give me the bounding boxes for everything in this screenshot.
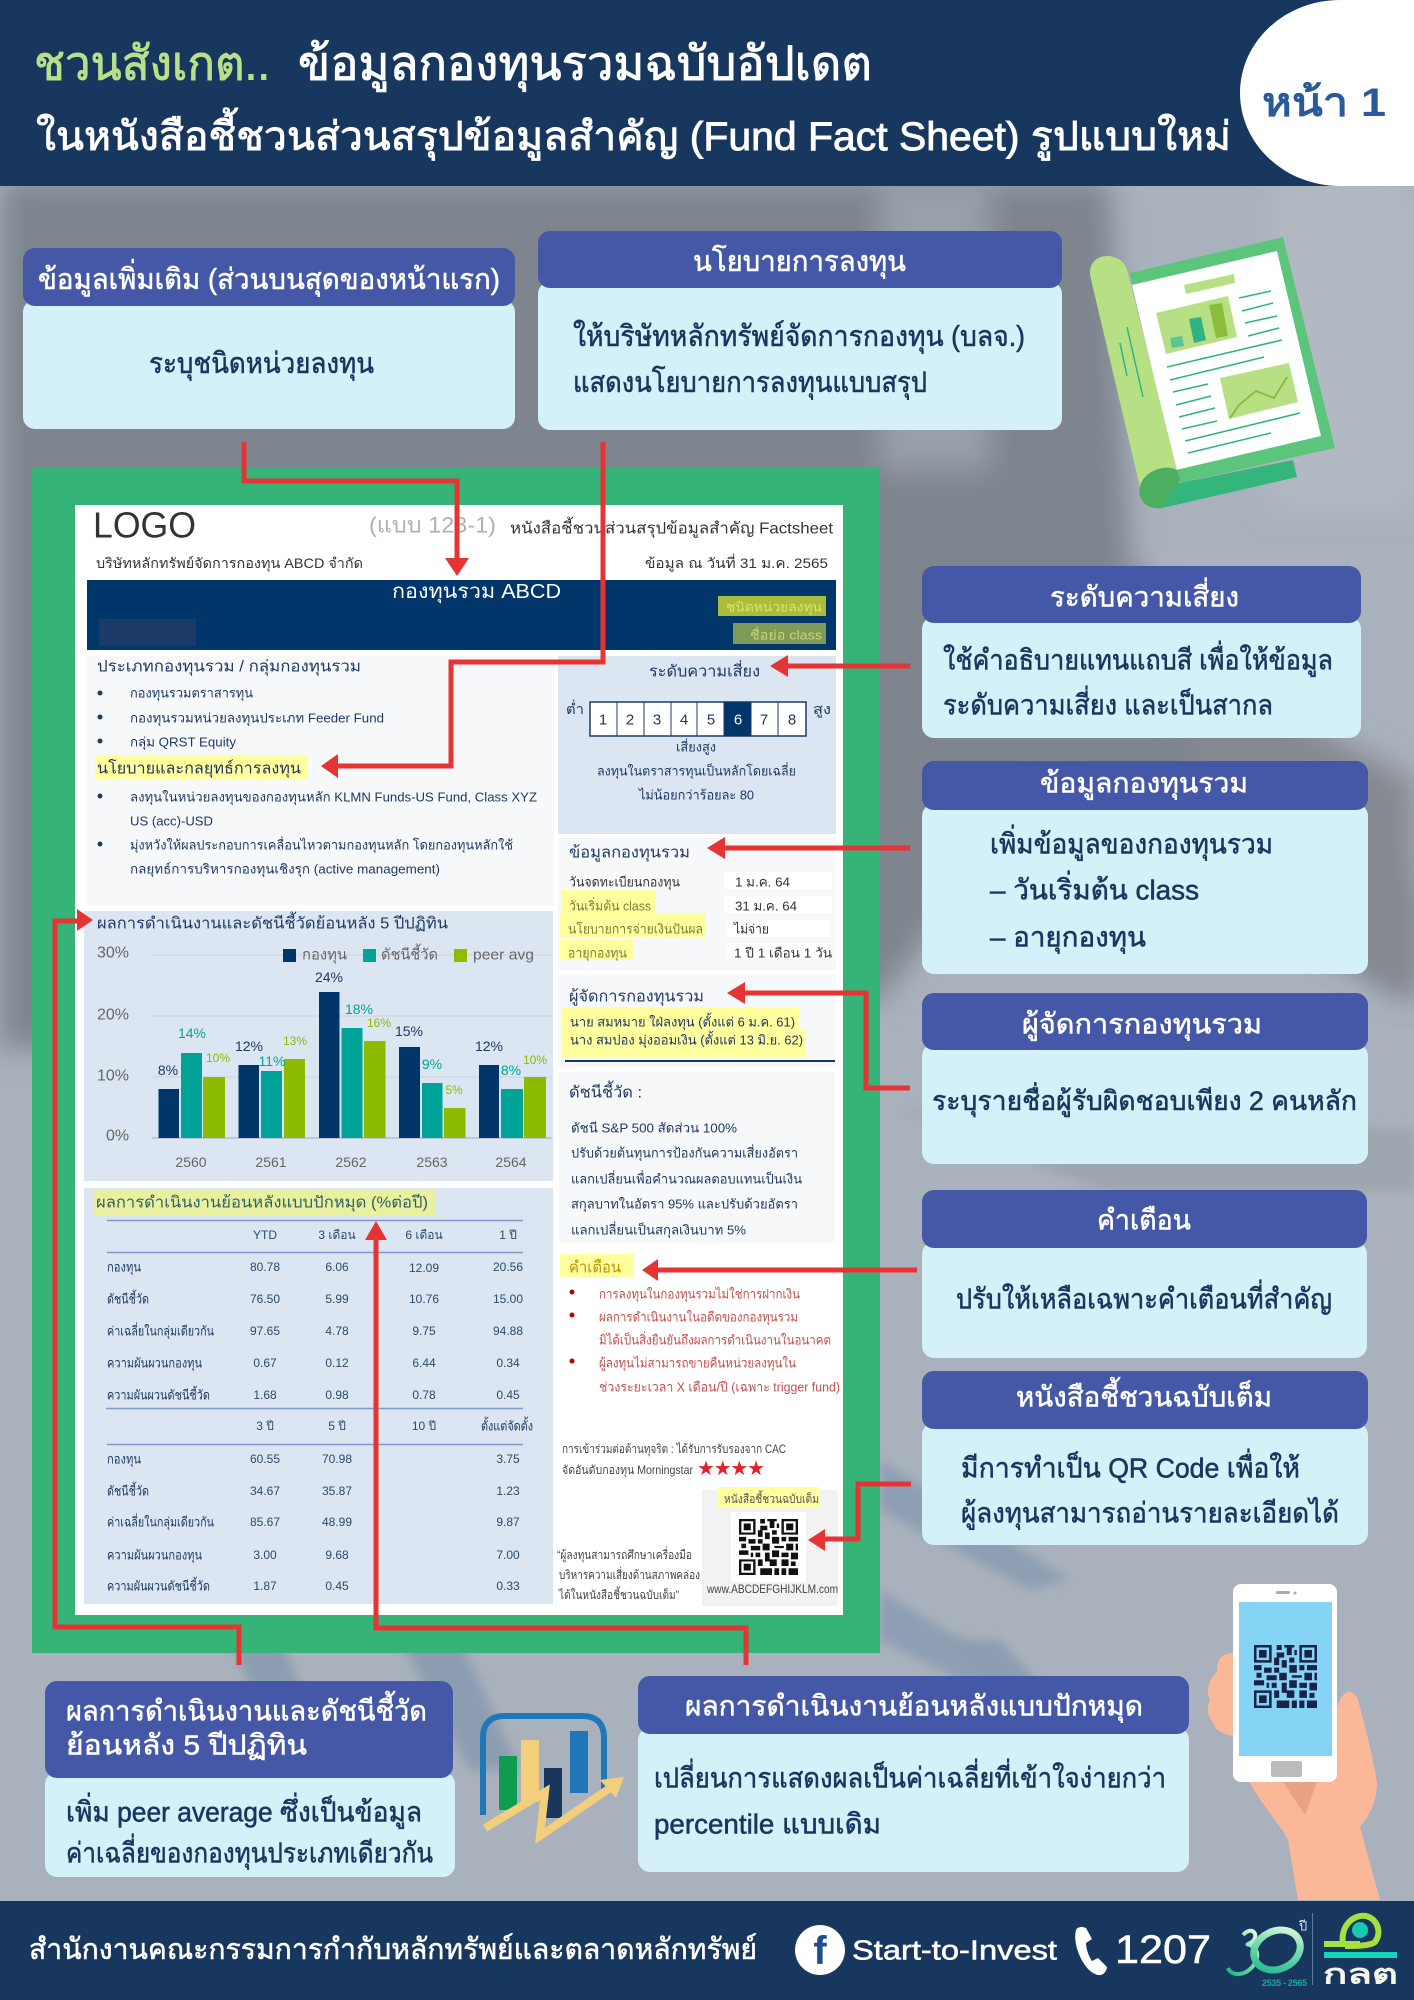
risk level panel: ระดับความเสี่ยง — [649, 660, 760, 680]
panel: fund manager — [922, 993, 1368, 1164]
axis labels: 20% — [97, 1006, 129, 1024]
arrow: risk panel — [770, 655, 910, 677]
arrow: warnings — [642, 1259, 917, 1281]
panel: 5 year performance note: ผลการดำเนินงานและดัชนีชี้วัด — [66, 1690, 427, 1726]
QR code panel: www.ABCDEFGHIJKLM.com — [706, 1582, 838, 1596]
table rows first block: 80.78 — [250, 1260, 280, 1274]
table rows second block: ความผันผวนกองทุน — [107, 1548, 202, 1564]
footer band — [0, 1901, 1414, 2000]
sheet header: หนังสือชี้ชวนส่วนสรุปข้อมูลสำคัญ Factsheet — [510, 516, 834, 538]
panel: investment policy: ให้บริษัทหลักทรัพย์จัดการกองทุน (บลจ.) — [573, 319, 1025, 354]
table rows first block: 5.99 — [325, 1292, 349, 1306]
panel: 5 year performance note: ค่าเฉลี่ยของกองทุนประเภทเดียวกัน — [66, 1834, 433, 1870]
QR code panel: หนังสือชี้ชวนฉบับเต็ม — [724, 1490, 819, 1506]
trailing returns table: ผลการดำเนินงานย้อนหลังแบบปักหมุด (%ต่อปี) — [96, 1194, 428, 1212]
page badge: หน้า 1 — [1262, 81, 1386, 125]
warnings: ผู้ลงทุนไม่สามารถขายคืนหน่วยลงทุนใน — [599, 1356, 796, 1372]
table rows first block: YTD — [253, 1228, 277, 1242]
table rows first block: 94.88 — [493, 1324, 523, 1338]
CAC and Morningstar rating: การเข้าร่วมต่อต้านทุจริต : ได้รับการรับรองจาก CAC — [562, 1442, 786, 1457]
table rows first block: ค่าเฉลี่ยในกลุ่มเดียวกัน — [107, 1322, 214, 1340]
panel: risk level: ระดับความเสี่ยง — [1050, 578, 1239, 612]
table rows first block: 1.68 — [253, 1388, 277, 1402]
table rows second block: 70.98 — [322, 1452, 352, 1466]
bar chart: 5 year performance: ผลการดำเนินงานและดัชนีชี้วัดย้อนหลัง 5 ปีปฏิทิน — [97, 912, 448, 932]
bar value labels: 8% — [501, 1062, 521, 1078]
bars — [158, 992, 546, 1138]
risk scale: 3 — [653, 712, 661, 728]
investor note: บริหารความเสี่ยงด้านสภาพคล่อง — [559, 1566, 700, 1582]
page badge — [1240, 0, 1414, 186]
risk scale: 7 — [760, 712, 768, 728]
table rows second block: 0.45 — [325, 1579, 349, 1593]
table rows second block: 10 ปี — [412, 1419, 436, 1433]
bar value labels: 5% — [445, 1083, 463, 1097]
fund type and policy text: มุ่งหวังให้ผลประกอบการเคลื่อนไหวตามกองทุนหลัก โดยกองทุนหลักใช้ — [130, 836, 513, 854]
panel: full prospectus: หนังสือชี้ชวนฉบับเต็ม — [1016, 1376, 1272, 1412]
risk level panel — [558, 656, 836, 834]
year labels: 2560 — [175, 1154, 207, 1170]
risk scale: 8 — [788, 712, 796, 728]
QR code panel — [702, 1487, 838, 1606]
table rows first block: 1 ปี — [499, 1228, 517, 1242]
table rows second block: 35.87 — [322, 1484, 352, 1498]
sheet header: ข้อมูล ณ วันที่ 31 ม.ค. 2565 — [645, 554, 828, 572]
icon: fact sheet document — [1090, 237, 1335, 508]
risk level panel: ไม่น้อยกว่าร้อยละ 80 — [638, 788, 754, 802]
bar value labels: 12% — [475, 1038, 503, 1054]
risk scale: 1 — [599, 712, 607, 728]
panel: risk level — [922, 566, 1361, 738]
table rows first block: ความผันผวนดัชนีชี้วัด — [107, 1386, 210, 1402]
risk scale: 6 — [734, 712, 742, 728]
table rows first block: 9.75 — [412, 1324, 436, 1338]
panel: trailing returns note — [638, 1676, 1189, 1872]
table rows first block: 15.00 — [493, 1292, 523, 1306]
investor note: ได้ในหนังสือชี้ชวนฉบับเต็ม” — [558, 1586, 679, 1602]
benchmark: ดัชนี S&P 500 สัดส่วน 100% — [571, 1120, 737, 1136]
fund managers: นาย สมหมาย ใฝ่ลงทุน (ตั้งแต่ 6 ม.ค. 61) — [570, 1012, 795, 1030]
legend: ดัชนีชี้วัด — [381, 944, 438, 964]
bar value labels: 15% — [395, 1023, 423, 1039]
table rows second block: 3.75 — [496, 1452, 520, 1466]
panel: warnings: ปรับให้เหลือเฉพาะคำเตือนที่สำคัญ — [956, 1280, 1332, 1314]
table rows second block: 48.99 — [322, 1515, 352, 1529]
table rows first block: ความผันผวนกองทุน — [107, 1356, 202, 1372]
risk scale: 5 — [707, 712, 715, 728]
table rows second block: 85.67 — [250, 1515, 280, 1529]
icon: hand holding phone with QR — [1208, 1584, 1380, 1900]
CAC and Morningstar rating: จัดอันดับกองทุน Morningstar — [562, 1463, 693, 1478]
CAC and Morningstar rating: ★★★★ — [697, 1458, 765, 1480]
fund information table — [558, 838, 836, 970]
warnings — [560, 1254, 840, 1394]
year labels: 2561 — [255, 1154, 287, 1170]
table rows second block: 9.87 — [496, 1515, 520, 1529]
table rows second block: กองทุน — [107, 1452, 141, 1468]
year labels: 2564 — [495, 1154, 527, 1170]
legend — [283, 944, 534, 964]
benchmark: ปรับด้วยต้นทุนการป้องกันความเสี่ยงอัตรา — [571, 1144, 798, 1162]
logo: 30 years: 2535 - 2565 — [1262, 1978, 1307, 1988]
icon: rising bar chart — [483, 1716, 624, 1836]
table rows first block: ดัชนีชี้วัด — [107, 1290, 149, 1306]
investor note — [557, 1546, 700, 1602]
risk scale — [590, 702, 806, 736]
table rows first block: 97.65 — [250, 1324, 280, 1338]
bar value labels: 10% — [206, 1051, 230, 1065]
table rows first block: กองทุน — [107, 1260, 141, 1276]
table rows second block: ความผันผวนดัชนีชี้วัด — [107, 1576, 210, 1594]
table rows first block: 0.12 — [325, 1356, 349, 1370]
legend: peer avg — [473, 946, 534, 964]
bar value labels: 10% — [523, 1053, 547, 1067]
panel: 5 year performance note: เพิ่ม peer average ซึ่งเป็นข้อมูล — [66, 1792, 422, 1830]
axis labels: 0% — [106, 1128, 129, 1144]
risk level panel: ต่ำ — [566, 700, 584, 717]
title line 1: ข้อมูลกองทุนรวมฉบับอัปเดต — [298, 36, 872, 92]
risk scale: 2 — [626, 712, 634, 728]
table rows first block: 6 เดือน — [405, 1228, 443, 1242]
panel: full prospectus — [922, 1371, 1368, 1545]
table rows first block: 0.34 — [496, 1356, 520, 1370]
bar value labels: 24% — [315, 969, 343, 985]
panel: additional info: ข้อมูลเพิ่มเติม (ส่วนบนสุดของหน้าแรก) — [38, 259, 500, 297]
panel: risk level: ระดับความเสี่ยง และเป็นสากล — [943, 686, 1273, 720]
sheet header: บริษัทหลักทรัพย์จัดการกองทุน ABCD จำกัด — [96, 555, 363, 572]
panel: trailing returns note: เปลี่ยนการแสดงผลเป็นค่าเฉลี่ยที่เข้าใจง่ายกว่า — [654, 1758, 1166, 1794]
fund type and policy text: กลุ่ม QRST Equity — [130, 734, 237, 750]
logo: 30 years — [1228, 1918, 1307, 1988]
fund information table: ข้อมูลกองทุนรวม — [569, 844, 690, 862]
fund name band — [87, 580, 836, 650]
table rows second block: ดัชนีชี้วัด — [107, 1482, 149, 1498]
panel: additional info — [23, 248, 515, 429]
year labels: 2563 — [416, 1154, 448, 1170]
table rows first block: 0.98 — [325, 1388, 349, 1402]
benchmark: สกุลบาทในอัตรา 95% และปรับด้วยอัตรา — [571, 1196, 798, 1212]
fund type and policy text — [87, 656, 554, 905]
table rows first block: 6.44 — [412, 1356, 436, 1370]
fund type and policy text: ลงทุนในหน่วยลงทุนของกองทุนหลัก KLMN Funds-US Fund, Class XYZ — [130, 790, 537, 806]
table rows second block: ค่าเฉลี่ยในกลุ่มเดียวกัน — [107, 1514, 214, 1530]
bar value labels: 18% — [345, 1001, 373, 1017]
panel: fund information: เพิ่มข้อมูลของกองทุนรวม — [990, 824, 1273, 862]
table rows first block: 0.45 — [496, 1388, 520, 1402]
risk level panel: สูง — [813, 701, 831, 718]
bar value labels: 12% — [235, 1038, 263, 1054]
panel: trailing returns note: ผลการดำเนินงานย้อนหลังแบบปักหมุด — [685, 1690, 1143, 1724]
arrow: 5 year chart — [55, 909, 239, 1665]
panel: fund manager: ผู้จัดการกองทุนรวม — [1022, 1008, 1262, 1042]
fund information table: วันเริ่มต้น class — [569, 898, 651, 914]
fund type and policy text: กองทุนรวมตราสารทุน — [130, 686, 253, 702]
investor note: “ผู้ลงทุนสามารถศึกษาเครื่องมือ — [557, 1546, 692, 1563]
warnings: มิได้เป็นสิ่งยืนยันถึงผลการดำเนินงานในอนาคต — [599, 1330, 831, 1348]
table rows second block: 5 ปี — [328, 1419, 346, 1433]
icon: facebook: f — [813, 1929, 827, 1973]
warnings: การลงทุนในกองทุนรวมไม่ใช่การฝากเงิน — [599, 1286, 800, 1302]
axis labels: 30% — [97, 944, 129, 962]
panel: fund information — [922, 761, 1368, 974]
bar value labels: 9% — [422, 1056, 442, 1072]
fund information table: 1 ปี 1 เดือน 1 วัน — [734, 946, 832, 960]
table rows second block: 34.67 — [250, 1484, 280, 1498]
table rows first block — [107, 1228, 523, 1402]
fund name band: ชนิดหน่วยลงทุน — [726, 600, 822, 616]
warnings: ผลการดำเนินงานในอดีตของกองทุนรวม — [599, 1310, 798, 1326]
panel: additional info: ระบุชนิดหน่วยลงทุน — [149, 348, 374, 381]
table rows second block: 0.33 — [496, 1579, 520, 1593]
panel: trailing returns note: percentile แบบเดิม — [654, 1808, 881, 1840]
panel: risk level: ใช้คำอธิบายแทนแถบสี เพื่อให้ข้อมูล — [943, 640, 1333, 678]
icon: facebook — [795, 1925, 845, 1975]
panel: 5 year performance note: ย้อนหลัง 5 ปีปฏิทิน — [66, 1730, 307, 1760]
panel: fund information: – อายุกองทุน — [990, 922, 1146, 954]
fund name band: ชื่อย่อ class — [750, 626, 823, 642]
hotline number: 1207 — [1115, 1928, 1211, 1972]
table rows first block: 3 เดือน — [318, 1228, 356, 1242]
fund type and policy text: กองทุนรวมหน่วยลงทุนประเภท Feeder Fund — [130, 710, 384, 726]
bar value labels: 8% — [158, 1062, 178, 1078]
fund information table: 31 ม.ค. 64 — [735, 898, 797, 914]
panel: investment policy — [538, 231, 1062, 430]
year labels — [175, 1154, 527, 1170]
sheet header: (แบบ 123-1) — [369, 512, 496, 538]
table rows second block: 3.00 — [253, 1548, 277, 1562]
facebook page name: Start-to-Invest — [852, 1934, 1057, 1966]
title line 1: ชวนสังเกต.. — [34, 36, 270, 90]
arrow: policy to strategy section — [321, 442, 603, 778]
fund information table: วันจดทะเบียนกองทุน — [569, 874, 680, 890]
panel: full prospectus: มีการทำเป็น QR Code เพื่อให้ — [961, 1448, 1300, 1484]
benchmark: แลกเปลี่ยนเป็นสกุลเงินบาท 5% — [571, 1220, 746, 1238]
table rows first block: 76.50 — [250, 1292, 280, 1306]
panel: 5 year performance note — [45, 1681, 455, 1877]
title line 2: ในหนังสือชี้ชวนส่วนสรุปข้อมูลสำคัญ (Fund Fact Sheet) รูปแบบใหม่ — [36, 107, 1231, 161]
table rows second block: 3 ปี — [256, 1419, 274, 1433]
table rows first block: 10.76 — [409, 1292, 439, 1306]
fund type and policy text: US (acc)-USD — [130, 814, 213, 828]
fund information table: ไม่จ่าย — [733, 922, 769, 936]
table rows first block: 12.09 — [409, 1261, 439, 1275]
legend: กองทุน — [302, 946, 347, 964]
table rows second block: 7.00 — [496, 1548, 520, 1562]
logo: 30 years: ปี — [1298, 1918, 1307, 1934]
bar value labels: 13% — [283, 1034, 307, 1048]
table rows second block: ตั้งแต่จัดตั้ง — [481, 1416, 533, 1434]
trailing returns table — [84, 1188, 553, 1604]
sheet header: LOGO — [93, 504, 196, 546]
bar value labels: 14% — [178, 1025, 206, 1041]
panel: investment policy: นโยบายการลงทุน — [693, 244, 906, 279]
panel: fund information: ข้อมูลกองทุนรวม — [1040, 768, 1248, 800]
benchmark — [559, 1072, 835, 1243]
arrow: fund manager — [727, 982, 910, 1088]
fund managers — [558, 975, 836, 1067]
fund type and policy text: ประเภทกองทุนรวม / กลุ่มกองทุนรวม — [97, 658, 361, 676]
fund information table: 1 ม.ค. 64 — [735, 874, 790, 890]
panel: warnings — [922, 1190, 1367, 1358]
fund managers: ผู้จัดการกองทุนรวม — [569, 988, 704, 1006]
fund type and policy text: นโยบายและกลยุทธ์การลงทุน — [97, 758, 301, 778]
table rows second block: 1.23 — [496, 1484, 520, 1498]
benchmark: แลกเปลี่ยนเพื่อคำนวณผลตอบแทนเป็นเงิน — [571, 1170, 802, 1186]
risk level panel: ลงทุนในตราสารทุนเป็นหลักโดยเฉลี่ย — [597, 762, 796, 780]
table rows first block: 0.78 — [412, 1388, 436, 1402]
table rows second block: 9.68 — [325, 1548, 349, 1562]
fund managers: นาง สมปอง มุ่งออมเงิน (ตั้งแต่ 13 มิ.ย. 62) — [570, 1030, 803, 1048]
header band — [0, 0, 1414, 186]
panel: fund manager: ระบุรายชื่อผู้รับผิดชอบเพียง 2 คนหลัก — [932, 1082, 1357, 1118]
benchmark: ดัชนีชี้วัด : — [569, 1080, 642, 1102]
table rows first block: 6.06 — [325, 1260, 349, 1274]
sheet header — [93, 504, 834, 572]
panel: fund information: – วันเริ่มต้น class — [990, 870, 1199, 906]
icon: phone — [1075, 1927, 1107, 1975]
bar chart: 5 year performance — [84, 911, 553, 1181]
arrow: fund info — [707, 837, 910, 859]
footer organisation name: สำนักงานคณะกรรมการกำกับหลักทรัพย์และตลาดหลักทรัพย์ — [29, 1933, 757, 1966]
table rows second block — [107, 1416, 533, 1594]
fund type and policy text: กลยุทธ์การบริหารกองทุนเชิงรุก (active management) — [130, 862, 440, 878]
table rows first block: 20.56 — [493, 1260, 523, 1274]
fund name band: กองทุนรวม ABCD — [392, 581, 561, 604]
axis labels — [97, 944, 129, 1144]
axis labels: 10% — [97, 1068, 129, 1084]
arrow: QR code — [808, 1484, 911, 1551]
year labels: 2562 — [335, 1154, 367, 1170]
CAC and Morningstar rating — [562, 1442, 786, 1480]
warnings: ช่วงระยะเวลา X เดือน/ปี (เฉพาะ trigger fund) — [599, 1380, 840, 1394]
table rows second block: 1.87 — [253, 1579, 277, 1593]
risk level panel: เสี่ยงสูง — [676, 738, 716, 756]
bar value labels: 11% — [259, 1053, 285, 1069]
bar value labels: 16% — [367, 1016, 391, 1030]
fund information table: นโยบายการจ่ายเงินปันผล — [568, 922, 703, 936]
bar value labels — [158, 969, 547, 1097]
logo: SEC: กลต — [1323, 1958, 1398, 1990]
arrow: additional info to fund name — [244, 442, 469, 576]
logo: SEC — [1312, 1913, 1398, 1990]
table rows second block: 60.55 — [250, 1452, 280, 1466]
warnings: คำเตือน — [569, 1258, 621, 1276]
panel: investment policy: แสดงนโยบายการลงทุนแบบสรุป — [573, 365, 927, 400]
panel: full prospectus: ผู้ลงทุนสามารถอ่านรายละเอียดได้ — [961, 1498, 1339, 1530]
arrow: trailing returns table — [365, 1221, 746, 1665]
fund information table: อายุกองทุน — [568, 946, 627, 962]
title line 1 — [34, 36, 872, 92]
risk scale: 4 — [680, 712, 688, 728]
table rows first block: 4.78 — [325, 1324, 349, 1338]
panel: sample fact sheet — [32, 467, 880, 1653]
panel: warnings: คำเตือน — [1097, 1204, 1191, 1236]
table rows first block: 0.67 — [253, 1356, 277, 1370]
